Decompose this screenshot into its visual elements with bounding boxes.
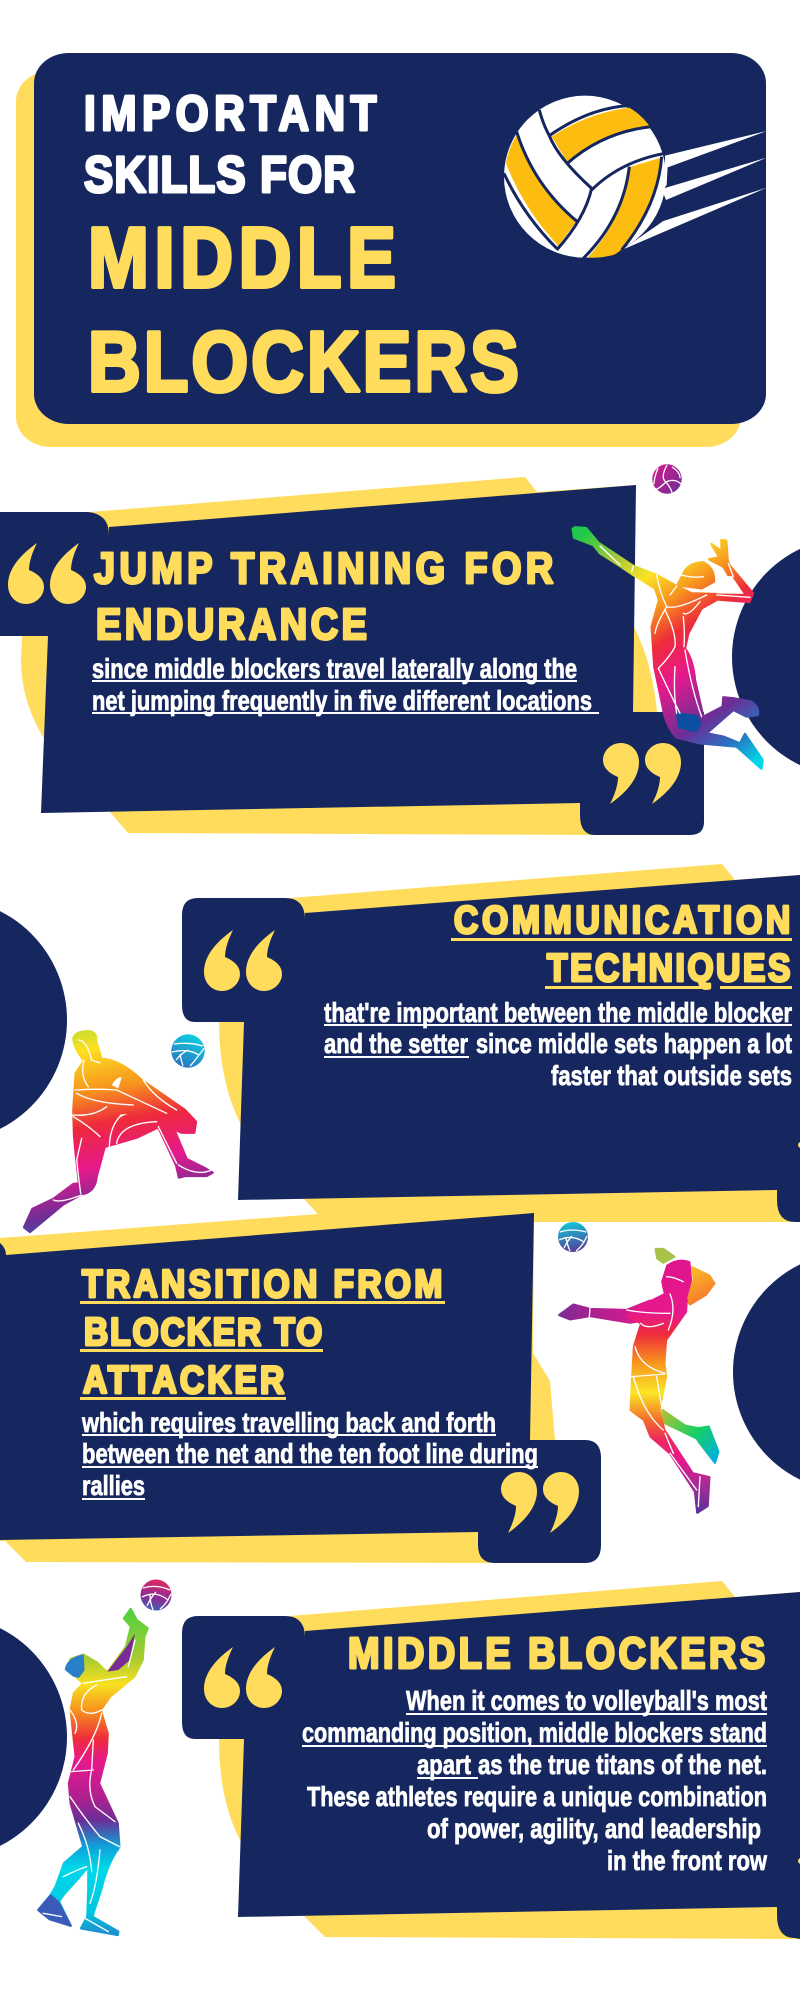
athlete: passing player [24,1031,213,1232]
icon: teal ball [558,1222,588,1252]
heading: communication: COMMUNICATION [454,898,790,942]
icon: flying volleyball [504,96,767,258]
panel yellow backing [219,1581,800,1939]
panel: header [16,53,767,447]
athlete: serving player [559,1249,718,1513]
decorative circle: section three [733,1252,800,1492]
closing quote edge [798,1142,800,1148]
athlete: spiking player [573,527,763,769]
closing quote edge [798,1858,800,1864]
athlete: setting player [38,1609,148,1935]
heading: middle blockers: MIDDLE BLOCKERS [348,1628,765,1678]
body text [302,1685,767,1876]
icon: magenta ball [652,464,682,494]
panel yellow backing [0,1213,555,1563]
icon: blue ball [171,1034,205,1068]
panel navy shape [182,875,800,1222]
body text [92,653,599,716]
decorative circle: section one [732,537,800,777]
icon: opening quote [204,1647,282,1708]
decorative circle: section two [0,898,67,1142]
icon: opening quote [8,543,86,604]
body text: which requires travelling back and forth [81,1407,496,1438]
panel yellow backing [219,864,800,1222]
body text [81,1407,538,1501]
body text: apart [417,1749,471,1780]
heading: endurance: ENDURANCE [96,599,367,649]
panel: communication techniques [182,864,800,1222]
body text [324,997,792,1091]
title line: important: IMPORTANT [84,86,376,141]
panel navy shape [0,485,704,835]
heading: attacker: ATTACKER [83,1358,284,1402]
panel: jump training [0,477,704,835]
panel navy shape [0,1213,601,1563]
panel: transition [0,1213,601,1563]
decorative circle: section four [0,1615,67,1859]
panel navy shape [182,1592,800,1939]
body text: and the setter [324,1028,468,1059]
icon: opening quote [204,930,282,991]
body text: since middle blockers travel laterally along the [92,653,577,684]
panel: middle blockers summary [182,1581,800,1939]
icon: closing quote [603,743,681,804]
body text: net jumping frequently in five different locations [92,685,592,716]
header navy card [34,53,766,424]
heading: techniques: TECHNIQUES [547,946,790,990]
title line: skills for: SKILLS FOR [84,147,355,204]
body text: rallies [82,1470,145,1501]
title line: middle: MIDDLE [88,210,396,305]
heading: blocker to: BLOCKER TO [84,1310,322,1354]
header yellow backing [16,71,741,447]
title line: blockers: BLOCKERS [88,314,519,409]
body text: between the net and the ten foot line during [82,1438,538,1469]
heading: transition from: TRANSITION FROM [82,1262,442,1306]
heading: jump training: JUMP TRAINING FOR [94,543,553,593]
panel yellow backing [21,477,657,835]
icon: closing quote [501,1472,579,1533]
icon: crimson ball [140,1580,172,1610]
